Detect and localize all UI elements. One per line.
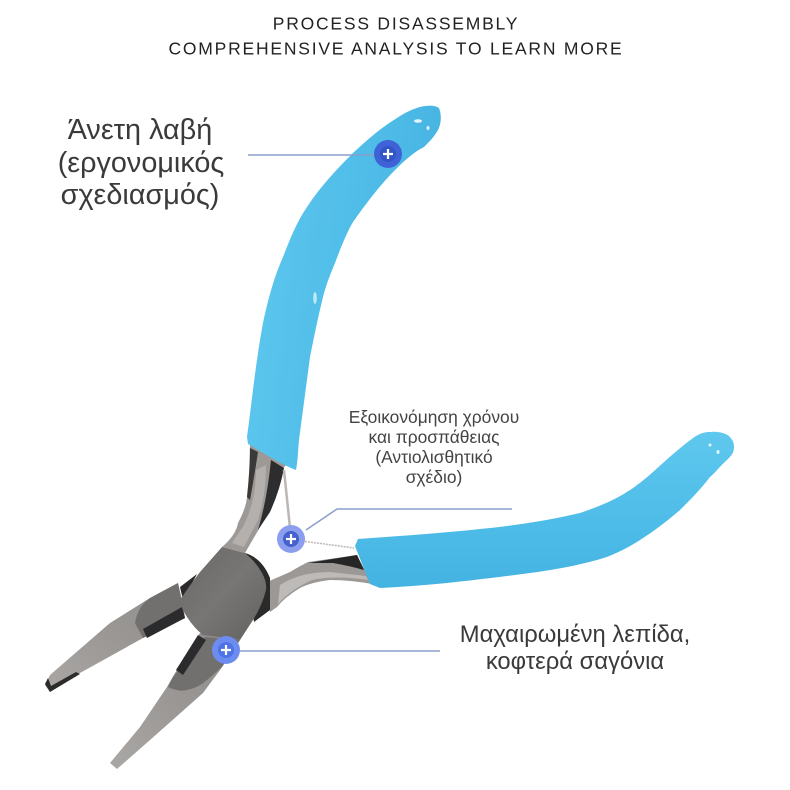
- lower handle highlights: [708, 444, 720, 454]
- upper handle highlights: [313, 119, 430, 304]
- pivot plate: [180, 547, 266, 640]
- dark left sliver of upper arm: [247, 448, 258, 500]
- upper jaw groove: [143, 607, 185, 638]
- lower jaw groove: [176, 635, 206, 675]
- label: comfortable handle: σχεδιασμός): [61, 179, 219, 211]
- upper jaw: [45, 583, 185, 692]
- title: COMPREHENSIVE ANALYSIS TO LEARN MORE: [168, 38, 624, 58]
- hinge shadow near upper jaw: [180, 574, 197, 600]
- lower handle: [355, 432, 734, 588]
- marker: anti-slip: [277, 525, 305, 553]
- label: saves time: Εξοικονόμηση χρόνου: [349, 407, 519, 427]
- upper arm: [222, 440, 290, 553]
- label: saves time: (Αντιολισθητικό: [375, 447, 493, 467]
- pliers: [45, 106, 734, 769]
- title: [168, 14, 624, 58]
- upper jaw dark tip edge: [45, 672, 80, 692]
- lower jaw upper shade: [168, 637, 240, 691]
- upper jaw inner shade: [135, 583, 185, 638]
- label: comfortable handle: [58, 114, 224, 211]
- dark hinge: [245, 553, 270, 622]
- title: PROCESS DISASSEMBLY: [273, 14, 519, 34]
- thin wires: [284, 470, 354, 548]
- upper arm highlight: [232, 465, 266, 547]
- callout leader lines: [240, 155, 512, 651]
- lower arm highlight: [278, 572, 368, 604]
- label: comfortable handle: Άνετη λαβή: [68, 114, 212, 146]
- dark inner edge of upper arm: [258, 460, 284, 530]
- upper handle: [247, 106, 441, 470]
- marker: handle: [374, 140, 402, 168]
- lower jaw: [110, 633, 240, 769]
- marker: blade: [212, 636, 240, 664]
- dark upper edge of lower arm: [308, 555, 364, 570]
- label: comfortable handle: (εργονομικός: [58, 147, 224, 179]
- label: saves time: [349, 407, 519, 487]
- label: saves time: και προσπάθειας: [368, 427, 500, 447]
- label: saves time: σχέδιο): [406, 467, 462, 487]
- label: sharp blade: κοφτερά σαγόνια: [486, 648, 664, 675]
- label: sharp blade: Μαχαιρωμένη λεπίδα,: [460, 621, 690, 648]
- lower arm: [267, 555, 372, 612]
- label: sharp blade: [460, 621, 690, 675]
